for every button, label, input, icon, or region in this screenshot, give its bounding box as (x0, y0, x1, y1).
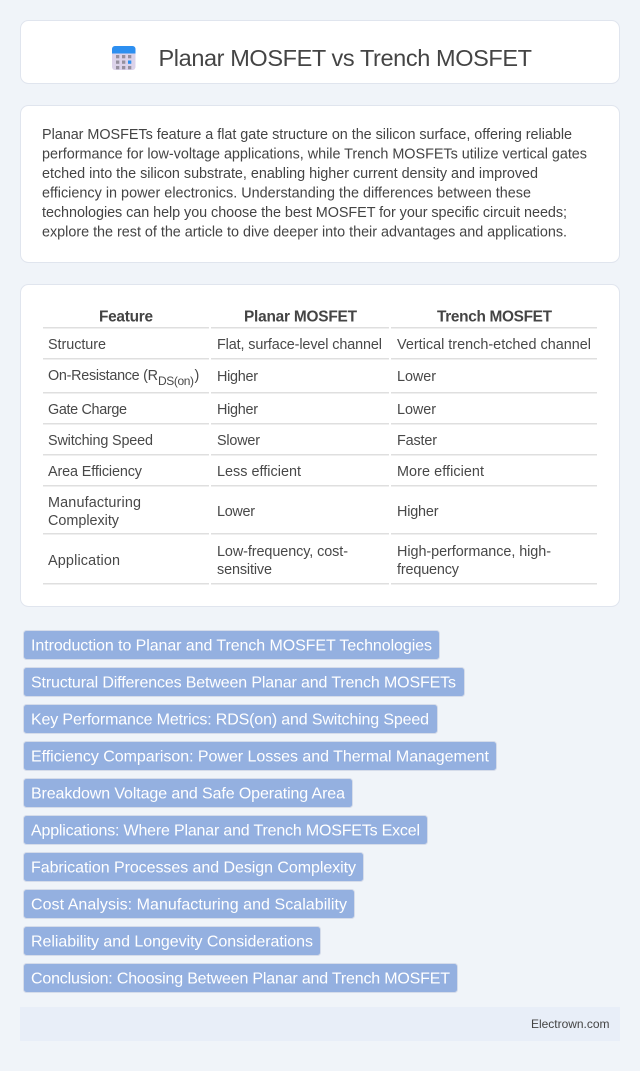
row: on-resistance: ) (194, 368, 199, 384)
intro text: explore the rest of the article to dive deeper into their advantages and applications. (42, 224, 567, 240)
row: area efficiency: More efficient (397, 464, 484, 480)
table header row: Trench MOSFET (437, 308, 553, 326)
row: switching speed: Faster (397, 433, 437, 449)
topic tag 9: Reliability and Longevity Considerations (31, 934, 313, 950)
topic tag 3 (24, 704, 438, 734)
topic tag 8: Cost Analysis: Manufacturing and Scalability (31, 896, 347, 914)
intro text: Planar MOSFETs feature a flat gate structure on the silicon surface, offering reliable (42, 127, 572, 143)
row: application: Low-frequency, cost- (217, 544, 348, 560)
footer (20, 1007, 620, 1041)
topic tag 6: Applications: Where Planar and Trench MOSFETs Excel (31, 822, 420, 840)
row: gate charge: Lower (397, 402, 436, 418)
topic tag 1: Introduction to Planar and Trench MOSFET Technologies (31, 638, 432, 654)
topic tag 6 (24, 816, 428, 844)
table header row (99, 308, 553, 326)
row: manufacturing complexity: Manufacturing (48, 495, 141, 511)
panel: comparison table (20, 284, 620, 606)
topic tag 8 (24, 890, 354, 918)
topic tag 10: Conclusion: Choosing Between Planar and Trench MOSFET (31, 970, 450, 988)
row: structure: Structure (48, 337, 106, 353)
topic tag 9 (24, 926, 320, 956)
header (20, 20, 620, 84)
row: switching speed: Switching Speed (48, 433, 153, 449)
intro text (42, 127, 587, 240)
row: on-resistance (48, 368, 436, 388)
topic tag 4 (24, 742, 496, 770)
row: switching speed (48, 433, 437, 449)
topic tag 1 (24, 630, 440, 660)
row: structure (48, 337, 591, 353)
row: application: sensitive (217, 562, 272, 578)
row: on-resistance: Lower (397, 369, 436, 385)
row: manufacturing complexity: Lower (217, 504, 255, 520)
intro text: performance for low-voltage applications, while Trench MOSFETs utilize vertical gates (42, 146, 587, 162)
row: on-resistance: DS(on) (158, 374, 194, 388)
topic tag 7: Fabrication Processes and Design Complexity (31, 860, 356, 876)
row: structure: Flat, surface-level channel (217, 337, 382, 353)
row: manufacturing complexity: Higher (397, 504, 439, 520)
topic tag 2 (24, 668, 464, 696)
row: application: High-performance, high- (397, 544, 551, 560)
panel: intro paragraph (20, 106, 620, 262)
topic tag 2: Structural Differences Between Planar and Trench MOSFETs (31, 674, 456, 692)
row: area efficiency: Area Efficiency (48, 464, 143, 480)
topic tag 5: Breakdown Voltage and Safe Operating Area (31, 786, 345, 802)
intro text: etched into the silicon substrate, enabling higher current density and improved (42, 166, 538, 182)
table header row: Feature (99, 308, 153, 326)
row: application (48, 544, 551, 578)
row: gate charge (48, 402, 436, 418)
row: area efficiency (48, 464, 484, 480)
intro text: technologies can help you choose the best MOSFET for your specific circuit needs; (42, 205, 567, 221)
topic tag 10 (24, 964, 458, 992)
row: structure: Vertical trench-etched channel (397, 337, 591, 353)
row: area efficiency: Less efficient (217, 464, 301, 480)
topic tag 4: Efficiency Comparison: Power Losses and Thermal Management (31, 748, 490, 766)
row: gate charge: Higher (217, 402, 258, 418)
title: Planar MOSFET vs Trench MOSFET (158, 45, 532, 71)
row: application: frequency (397, 562, 460, 578)
topic tag 7 (24, 852, 364, 882)
row: application: Application (48, 553, 120, 569)
topic tag 5 (24, 778, 352, 808)
row: manufacturing complexity: Complexity (48, 513, 120, 529)
icon: calendar app (112, 46, 136, 70)
table header row: Planar MOSFET (244, 308, 358, 326)
row: switching speed: Slower (217, 433, 260, 449)
row: manufacturing complexity (48, 495, 439, 529)
footer: Electrown.com (531, 1017, 610, 1031)
row: gate charge: Gate Charge (48, 402, 127, 418)
row: on-resistance: Higher (217, 369, 258, 385)
row: on-resistance: On-Resistance (R (48, 368, 158, 384)
intro text: efficiency in power electronics. Understanding the differences between these (42, 186, 531, 202)
topic tag 3: Key Performance Metrics: RDS(on) and Switching Speed (31, 712, 429, 728)
